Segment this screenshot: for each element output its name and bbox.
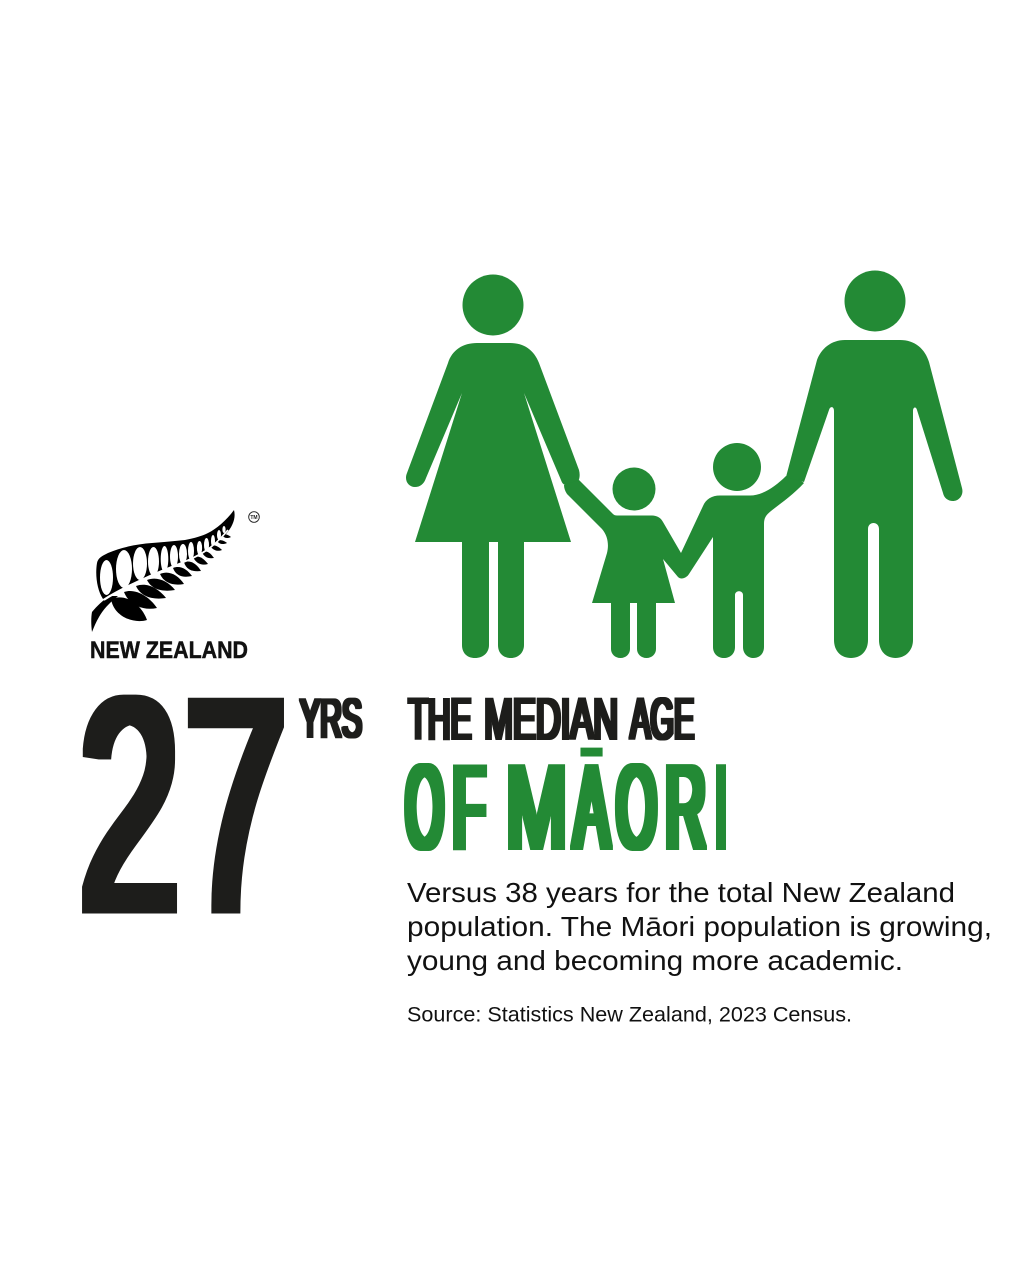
icon: silver fern	[91, 510, 235, 632]
family pictogram	[406, 270, 962, 658]
body text: young and becoming more academic.	[407, 945, 903, 976]
New Zealand fern logo	[90, 510, 259, 664]
girl figure	[564, 468, 690, 658]
icon: trademark symbol	[249, 512, 259, 522]
big number: 27: 2	[79, 636, 180, 974]
fern midrib	[104, 530, 228, 600]
heading: the median age: AGE	[630, 687, 694, 752]
heading: of Māori: M	[506, 741, 567, 874]
heading: of Māori: O	[406, 741, 443, 874]
heading: of Māori: F	[453, 741, 485, 874]
body text: Versus 38 years for the total New Zealand	[407, 877, 955, 908]
text: I	[718, 741, 724, 874]
heading: the median age: THE	[408, 687, 472, 752]
body text: population. The Māori population is growing,	[407, 911, 992, 942]
heading: of Māori: R	[665, 741, 706, 874]
big number: 27: 7	[184, 636, 287, 974]
woman figure	[406, 274, 580, 658]
unit: YRS: YRS	[300, 687, 362, 749]
boy figure	[669, 443, 804, 658]
heading: the median age: MEDIAN	[484, 687, 618, 752]
heading: of Māori: O	[616, 741, 656, 874]
icon: trademark symbol: TM	[250, 515, 258, 521]
heading: of Māori	[406, 741, 724, 874]
logo wordmark: NEW ZEALAND	[90, 637, 248, 664]
body text	[407, 877, 992, 976]
man figure	[786, 270, 962, 658]
source note: Source: Statistics New Zealand, 2023 Census.	[407, 1004, 852, 1026]
heading: of Māori: Ā	[574, 741, 609, 874]
